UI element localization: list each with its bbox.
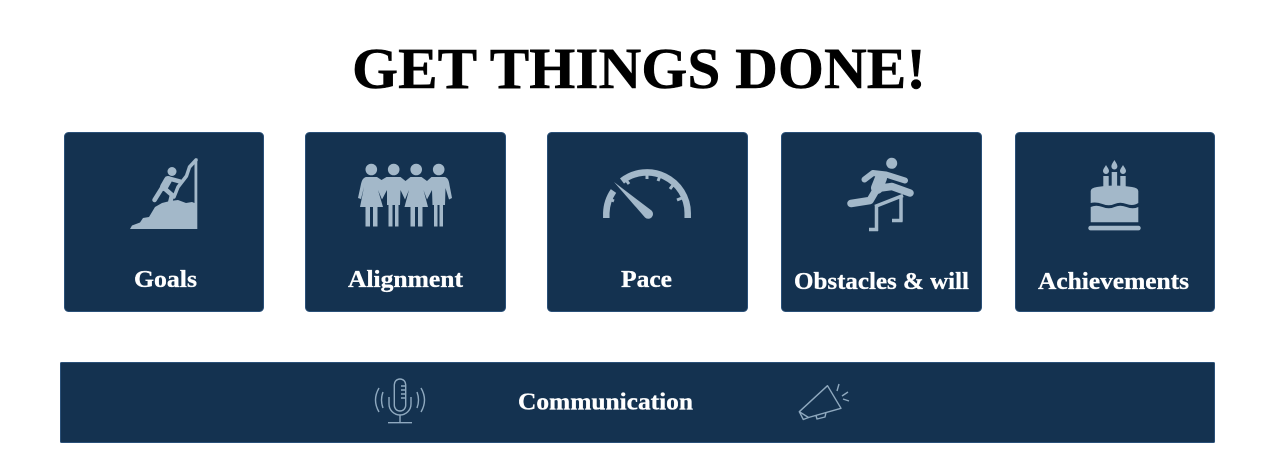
label: alignment: Alignment [348, 267, 463, 293]
icon: megaphone [799, 384, 849, 420]
icon: climber on a mountain [130, 158, 197, 229]
label: pace: Pace [621, 267, 672, 293]
icon: hurdler [851, 158, 910, 231]
panel: achievements [1016, 132, 1214, 312]
title: GET THINGS DONE! [352, 36, 926, 101]
label: communication: Communication [518, 390, 693, 416]
label: obstacles and will: Obstacles & will [794, 269, 969, 295]
icon: microphone [376, 379, 424, 423]
panel: communication [60, 362, 1214, 442]
panel: obstacles and will [782, 132, 982, 312]
label: goals: Goals [134, 267, 197, 293]
label: achievements: Achievements [1038, 269, 1189, 295]
icon: speedometer [606, 172, 688, 219]
panel: goals [64, 132, 264, 312]
panel: pace [548, 132, 748, 312]
icon: birthday cake [1088, 160, 1141, 230]
panel: alignment [306, 132, 506, 312]
icon: four people holding hands [358, 164, 452, 226]
